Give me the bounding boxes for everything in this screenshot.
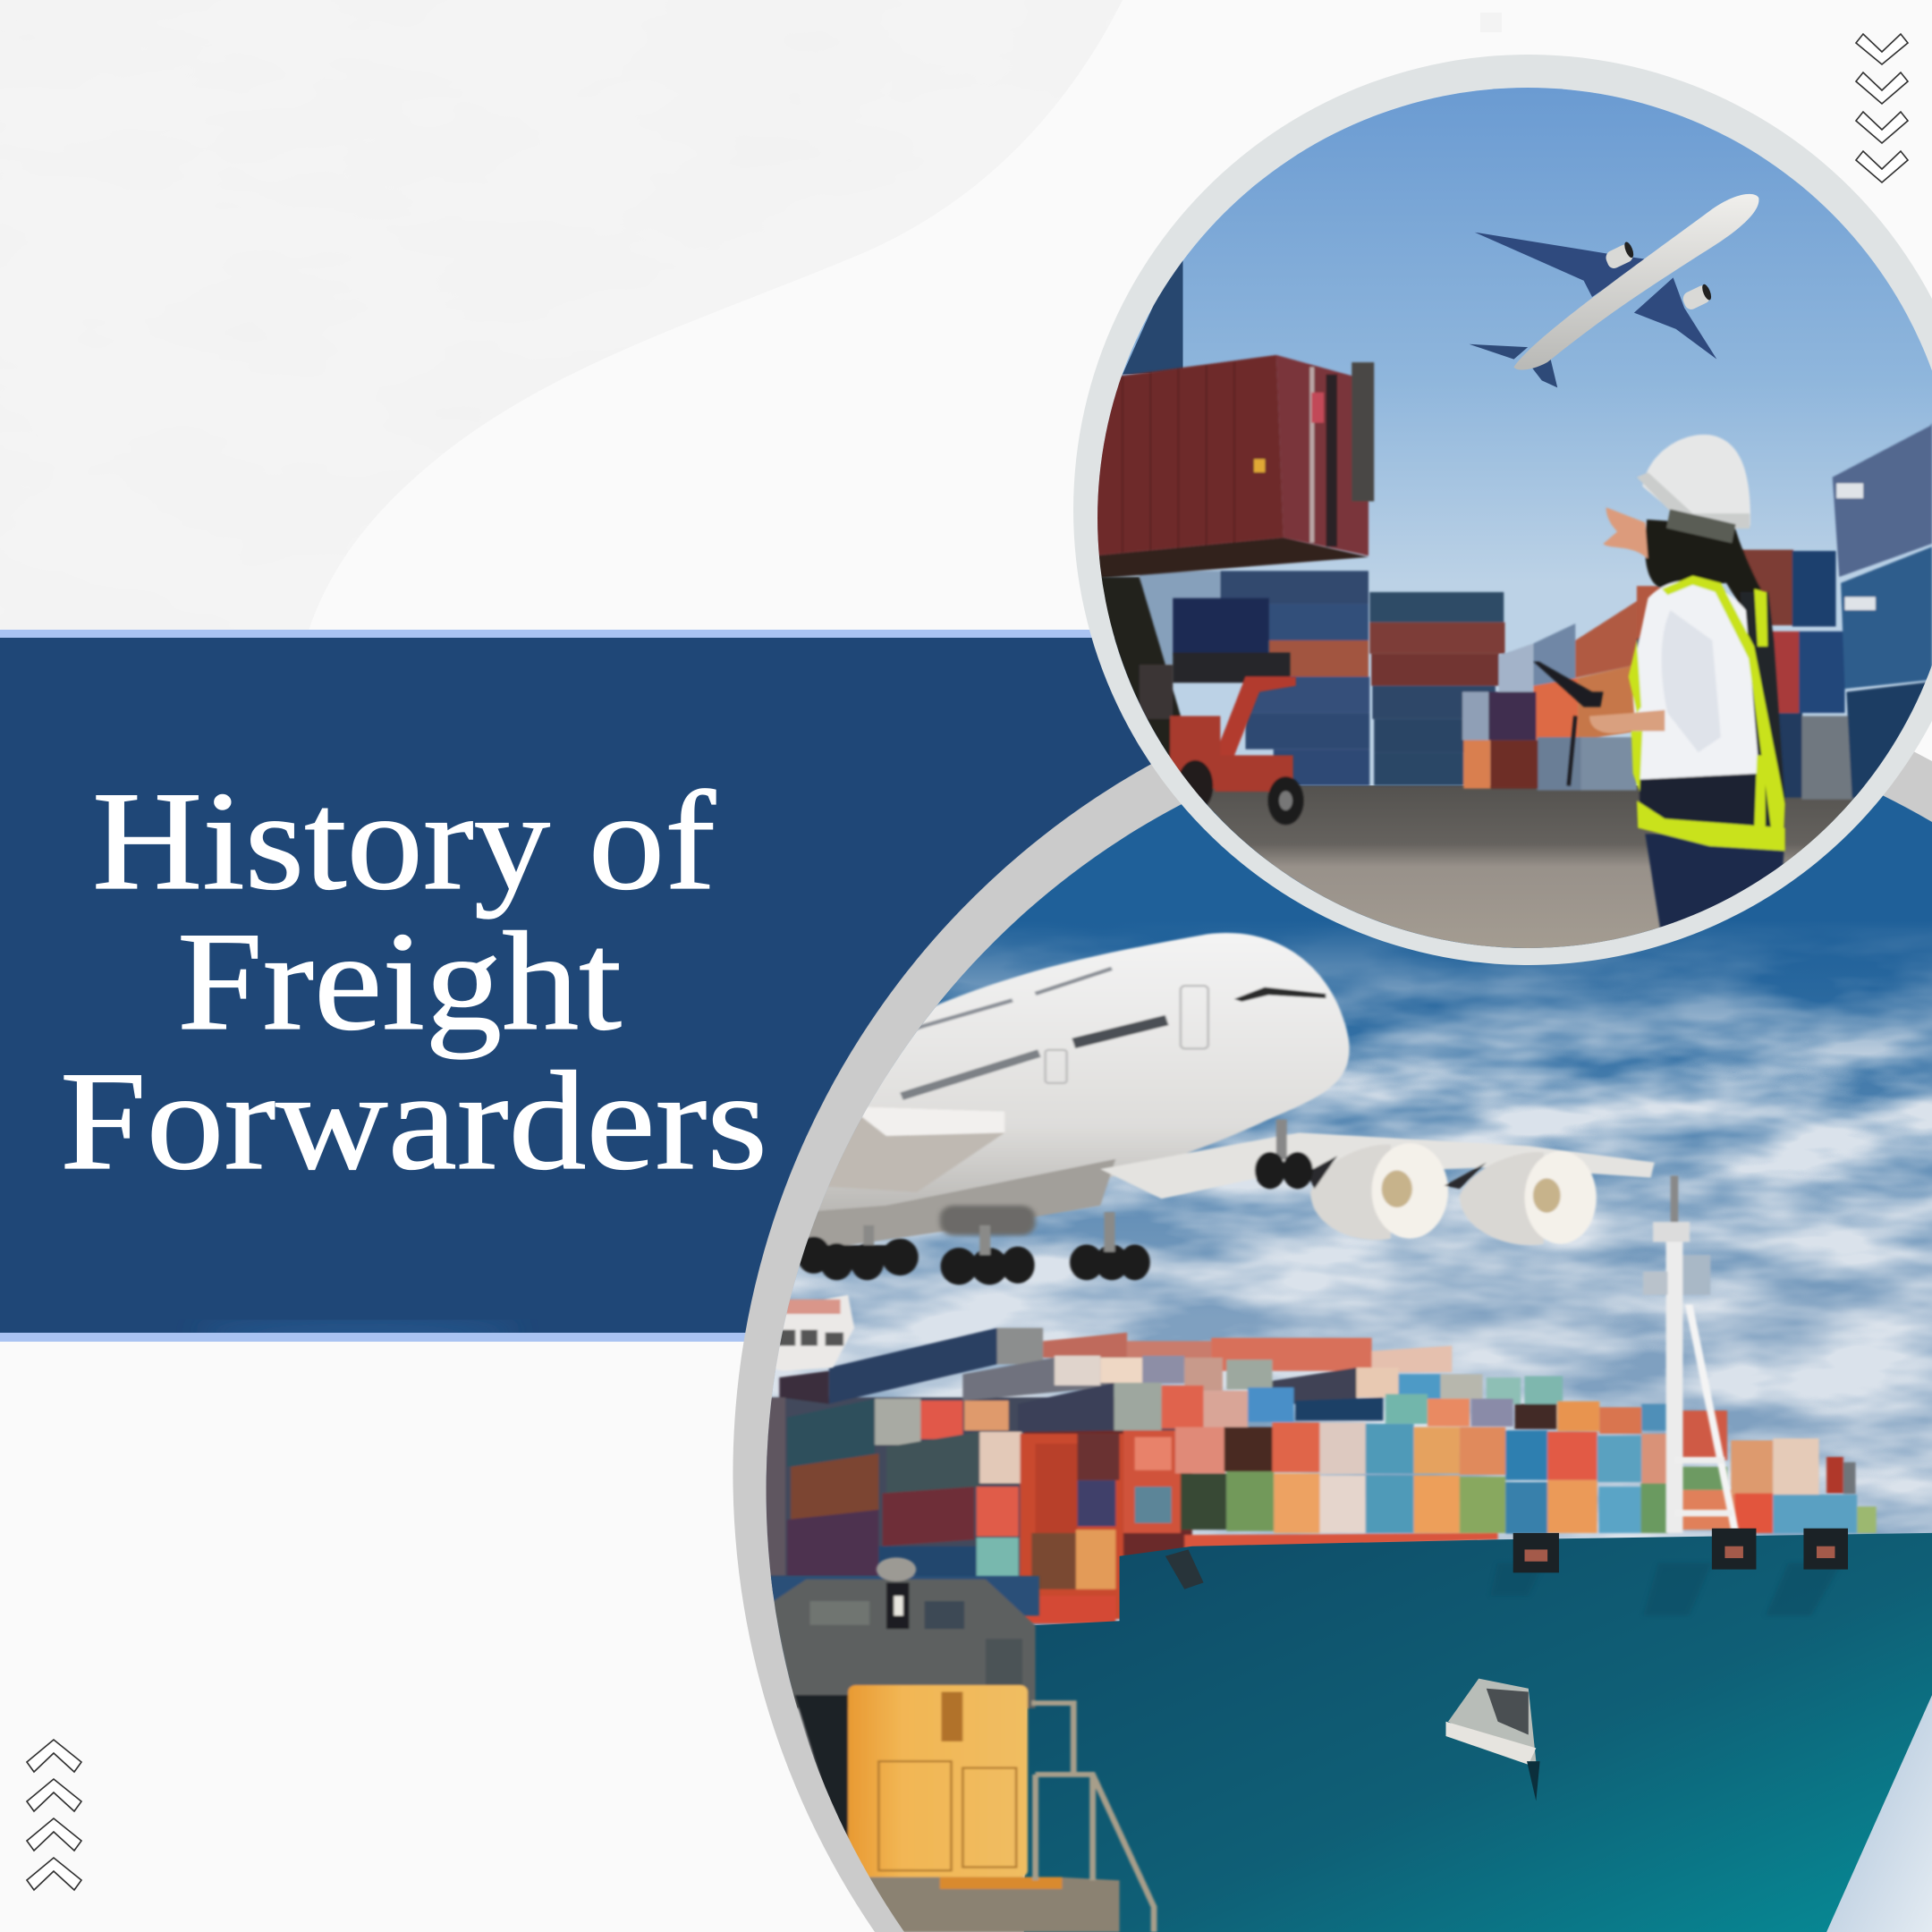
title: Freight: [177, 903, 622, 1060]
ground: [1191, 785, 1865, 948]
sky: [1097, 88, 1932, 798]
photo: plane and container ship: [733, 762, 1932, 1932]
chevrons: bottom left: [27, 1740, 81, 1890]
ship bridge: [767, 1295, 854, 1371]
title: History of: [92, 763, 716, 919]
container stacks: [1140, 423, 1932, 800]
container stacks: [764, 1328, 1877, 1623]
worker: [1533, 435, 1785, 929]
ring: top circle: [1073, 55, 1932, 965]
photo: worker and cargo plane: [1097, 88, 1932, 948]
locomotive: [733, 1557, 1154, 1932]
airplane: [779, 933, 1655, 1284]
cargo plane: [1469, 194, 1758, 387]
mast: [1643, 1175, 1739, 1533]
chevrons: top right: [1856, 34, 1908, 182]
red container: [1095, 355, 1374, 579]
building: [1123, 259, 1182, 375]
title: [60, 763, 767, 1199]
forklift: [1095, 577, 1304, 825]
title band: [0, 630, 1252, 1343]
sky with clouds: [733, 762, 1932, 1932]
ship hull: [1024, 1529, 1932, 1932]
title: Forwarders: [60, 1043, 767, 1199]
ring: large circle: [733, 663, 1932, 1932]
